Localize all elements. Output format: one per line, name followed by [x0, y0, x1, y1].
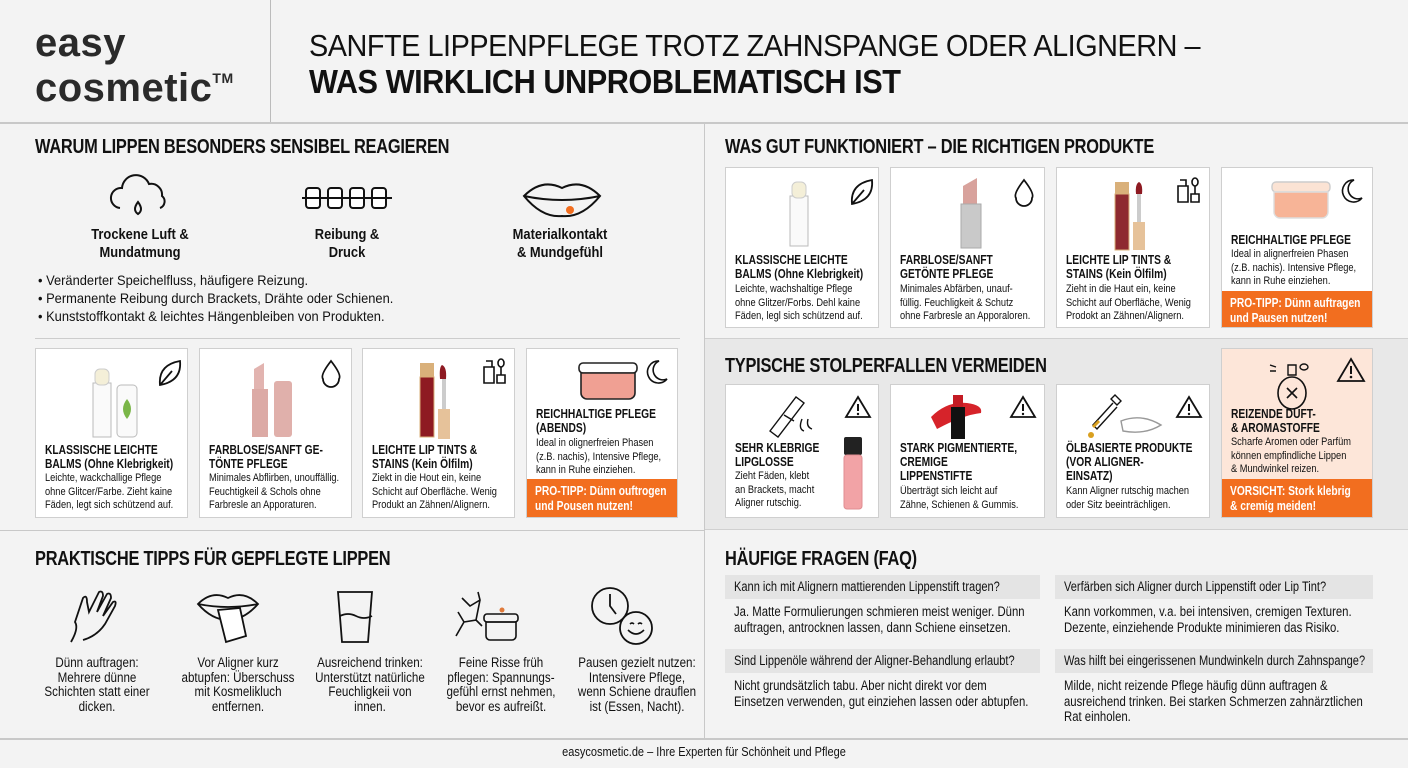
faq 1: Kann ich mit Alignern mattierenden Lippenstift tragen?	[734, 579, 1000, 594]
section: praktische tipps: Vor Aligner kurz	[197, 655, 279, 670]
card: lipgloss: Zieht Fäden, klebt	[735, 470, 809, 482]
bullets: • Kunststoffkontakt & leichtes Hängenbleiben von Produkten.	[38, 308, 385, 324]
section: praktische tipps	[0, 530, 704, 714]
card: farblose right: FARBLOSE/SANFT	[900, 253, 993, 267]
card: balms right: Leichte, wachshaltige Pflege	[735, 283, 852, 295]
section heading: was gut funktioniert: WAS GUT FUNKTIONIERT – DIE RICHTIGEN PRODUKTE	[725, 136, 1154, 158]
card: lip tints right: STAINS (Kein Ölfilm)	[1066, 267, 1167, 281]
card: ölbasiert: (VOR ALIGNER-	[1066, 455, 1144, 469]
title	[309, 28, 1201, 100]
label	[315, 226, 379, 261]
heading: PRAKTISCHE TIPPS FÜR GEPFLEGTE LIPPEN	[35, 548, 390, 570]
section: praktische tipps: Ausreichend trinken:	[317, 655, 423, 670]
card: lipgloss: LIPGLOSSE	[735, 455, 794, 469]
section: praktische tipps: Feuchligkeii von	[328, 684, 412, 699]
section: faq: auftragen, antrocknen lassen, dann Schiene einsetzen.	[734, 620, 1011, 634]
faq 4	[1055, 649, 1373, 673]
text: dicken.	[79, 698, 115, 714]
card: duftstoffe: REIZENDE DUFT-	[1231, 407, 1316, 421]
heading: HÄUFIGE FRAGEN (FAQ)	[725, 548, 917, 570]
card: lip tints right: Schicht auf Oberfläche, Wenig	[1066, 296, 1191, 308]
title: SANFTE LIPPENPFLEGE TROTZ ZAHNSPANGE ODER ALIGNERN –	[309, 28, 1200, 63]
card: farblose: FARBLOSE/SANFT GE-	[209, 443, 323, 457]
card: reichhaltig right: kann in Ruhe einziehen.	[1231, 275, 1330, 287]
card: lipgloss: SEHR KLEBRIGE	[735, 441, 819, 455]
card: lip tints: LEICHTE LIP TINTS &	[372, 443, 477, 457]
section: faq: Ja. Matte Formulierungen schmieren meist weniger. Dünn	[734, 604, 1025, 619]
card: reichhaltig: PRO-TIPP: Dünn ouftrogen	[535, 484, 667, 498]
card: duftstoffe: & Mundwinkel reizen.	[1231, 463, 1319, 475]
icon: braces	[302, 187, 392, 209]
card: reichhaltig right: (z.B. nachis). Intensive Pflege,	[1231, 262, 1356, 274]
card: pigmentierte: LIPPENSTIFTE	[900, 469, 972, 483]
card: farblose right: Minimales Abfärben, unauf-	[900, 283, 1013, 295]
text	[44, 655, 150, 714]
icon: cloud	[110, 174, 166, 216]
section: praktische tipps: entfernen.	[212, 698, 264, 714]
icon: hand	[70, 590, 117, 642]
card: ölbasiert: ÖLBASIERTE PRODUKTE	[1066, 441, 1192, 455]
section: faq: Kann vorkommen, v.a. bei intensiven, cremigen Texturen.	[1064, 604, 1352, 619]
card: lip tints right: Zieht in die Haut ein, keine	[1066, 283, 1176, 295]
card: reichhaltig: (z.B. nachis), Intensive Pflege,	[536, 450, 661, 462]
icon: clock smiley	[591, 587, 653, 645]
card: reichhaltig: kann in Ruhe einziehen.	[536, 464, 635, 476]
card: balms right: BALMS (Ohne Klebrigkeit)	[735, 267, 863, 281]
label: Druck	[329, 244, 365, 261]
icon: lips tissue	[196, 594, 260, 644]
card: balms: Leichte, wackchallige Pflege	[45, 472, 161, 484]
faq 2: Verfärben sich Aligner durch Lippenstift oder Lip Tint?	[1064, 579, 1326, 594]
card: balms: Fäden, legt sich schützend auf.	[45, 499, 173, 511]
card: pigmentierte: STARK PIGMENTIERTE,	[900, 441, 1017, 455]
section: faq: Dezente, einziehende Produkte minimieren das Risiko.	[1064, 620, 1339, 634]
card: farblose right: ohne Farbresle an Apporaloren.	[900, 310, 1030, 322]
section: warum lippen	[35, 136, 680, 339]
section: faq: Rat einholen.	[1064, 709, 1131, 724]
card: reichhaltig: Ideal in olignerfreien Phasen	[536, 437, 653, 449]
faq 3	[725, 649, 1040, 673]
footer: easycosmetic.de – Ihre Experten für Schönheit und Pflege	[562, 745, 846, 759]
card: lip tints right: LEICHTE LIP TINTS &	[1066, 253, 1171, 267]
section: stolperfallen background	[705, 338, 1408, 530]
faq 4: Was hilft bei eingerissenen Mundwinkeln durch Zahnspange?	[1064, 653, 1365, 668]
card: lipgloss: an Brackets, macht	[735, 484, 814, 496]
section: praktische tipps: innen.	[354, 698, 386, 714]
card: farblose right: füllig. Feuchligkeit & Schutz	[900, 296, 1013, 308]
section: faq: Einsetzen verwenden, gut einziehen lassen oder abtupfen.	[734, 694, 1028, 708]
label	[513, 226, 608, 261]
section: praktische tipps: wenn Schiene drauflen	[578, 684, 696, 699]
card: lip tints: Ziekt in die Hout ein, keine	[372, 472, 481, 484]
icon: cracks jar	[455, 592, 519, 641]
card: balms: BALMS (Ohne Klebrigkeit)	[45, 457, 173, 471]
bullets: • Permanente Reibung durch Brackets, Drähte oder Schienen.	[38, 290, 393, 306]
card: lip tints	[362, 348, 515, 518]
card: reichhaltig right	[1221, 167, 1373, 328]
heading: TYPISCHE STOLPERFALLEN VERMEIDEN	[725, 355, 1047, 377]
card: reichhaltig: (ABENDS)	[536, 421, 586, 435]
card: balms right	[725, 167, 879, 328]
faq 2	[1055, 575, 1373, 599]
section: praktische tipps: Feine Risse früh	[459, 655, 543, 670]
section: praktische tipps: gefühl ernst nehmen,	[446, 684, 556, 699]
text: Mehrere dünne	[58, 670, 136, 684]
card: reichhaltig right: Ideal in alignerfreien Phasen	[1231, 248, 1348, 260]
section: faq: Milde, nicht reizende Pflege häufig dünn auftragen &	[1064, 678, 1328, 693]
header logo: cosmeticTM	[35, 66, 234, 110]
card: duftstoffe	[1221, 348, 1373, 518]
card: farblose: Farbresle an Apporaturen.	[209, 499, 317, 511]
card: balms right: KLASSISCHE LEICHTE	[735, 253, 848, 267]
card: duftstoffe: & cremig meiden!	[1230, 499, 1316, 513]
label: Reibung &	[315, 226, 379, 243]
header logo	[35, 21, 234, 110]
card: pigmentierte	[890, 384, 1045, 518]
card: balms right: Fäden, legl sich schützend auf.	[735, 310, 863, 322]
card: farblose: Minimales Abflirben, unouffällig.	[209, 472, 339, 484]
card: farblose right: GETÖNTE PFLEGE	[900, 267, 993, 281]
faq 1	[725, 575, 1040, 599]
card: balms: KLASSISCHE LEICHTE	[45, 443, 158, 457]
header logo: easy	[35, 21, 126, 65]
card: reichhaltig right: REICHHALTIGE PFLEGE	[1231, 233, 1351, 247]
card: farblose right	[890, 167, 1045, 328]
section: praktische tipps: abtupfen: Überschuss	[182, 670, 294, 684]
card: lipgloss: Aligner rutschig.	[735, 497, 801, 509]
label: Trockene Luft &	[91, 226, 189, 243]
label	[91, 226, 189, 261]
card: balms right: ohne Glitzer/Forbs. Dehl kaine	[735, 296, 860, 308]
card: reichhaltig: und Pousen nutzen!	[535, 499, 633, 513]
card: balms	[35, 348, 188, 518]
section: praktische tipps: mit Kosmelikluch	[194, 684, 282, 699]
icon: lips	[522, 183, 602, 218]
heading: WARUM LIPPEN BESONDERS SENSIBEL REAGIEREN	[35, 136, 449, 158]
card: farblose: Feuchtigkeil & Schols ohne	[209, 486, 321, 498]
card: farblose	[199, 348, 352, 518]
label: & Mundgefühl	[517, 244, 603, 261]
label: Mundatmung	[100, 244, 180, 261]
card: duftstoffe: können empfindliche Lippen	[1231, 450, 1346, 462]
card: balms: ohne Glitcer/Farbe. Zieht kaine	[45, 486, 172, 498]
text: Schichten statt einer	[44, 684, 150, 699]
card: pigmentierte: Zähne, Schienen & Gummis.	[900, 498, 1018, 510]
card: duftstoffe: & AROMASTOFFE	[1231, 421, 1320, 435]
card: duftstoffe: Scharfe Aromen oder Parfüm	[1231, 436, 1351, 448]
card: reichhaltig: REICHHALTIGE PFLEGE	[536, 407, 656, 421]
card: ölbasiert: oder Sitz beeinträchligen.	[1066, 498, 1171, 510]
card: lip tints: Schicht auf Oberfläche. Wenig	[372, 486, 497, 498]
section: faq: ausreichend trinken. Bei starken Schmerzen zahnärztlichen	[1064, 694, 1363, 708]
section: praktische tipps: bevor es aufreißt.	[456, 698, 546, 714]
card: pigmentierte: Überträgt sich leicht auf	[900, 485, 997, 497]
card: lip tints right: Prodokt an Zähnen/Alignern.	[1066, 310, 1184, 322]
section: praktische tipps: Unterstützt natürliche	[315, 670, 425, 684]
card: reichhaltig	[526, 348, 678, 518]
section: praktische tipps: ist (Essen, Nacht).	[590, 698, 684, 714]
card: farblose: TÖNTE PFLEGE	[209, 457, 288, 471]
icon: glass	[337, 591, 373, 643]
text: Dünn auftragen:	[55, 655, 139, 670]
section: praktische tipps: Intensivere Pflege,	[589, 670, 685, 684]
card: lip tints: STAINS (Kein Ölfilm)	[372, 457, 473, 471]
section: faq: Nicht grundsätzlich tabu. Aber nicht direkt vor dem	[734, 678, 987, 693]
section: praktische tipps: pflegen: Spannungs-	[447, 670, 555, 684]
card: reichhaltig right: PRO-TIPP: Dünn auftragen	[1230, 296, 1360, 310]
faq 3: Sind Lippenöle während der Aligner-Behandlung erlaubt?	[734, 653, 1015, 668]
card: ölbasiert: Kann Aligner rutschig machen	[1066, 485, 1189, 497]
card: lip tints right	[1056, 167, 1210, 328]
bullets: • Veränderter Speichelfluss, häufigere Reizung.	[38, 272, 308, 288]
card: ölbasiert: EINSATZ)	[1066, 469, 1113, 483]
card: reichhaltig right: und Pausen nutzen!	[1230, 311, 1327, 325]
section: praktische tipps: Pausen gezielt nutzen:	[578, 655, 696, 670]
card: lipgloss	[725, 384, 879, 518]
card: pigmentierte: CREMIGE	[900, 455, 948, 469]
card: duftstoffe: VORSICHT: Stork klebrig	[1230, 484, 1351, 498]
bullets	[38, 272, 393, 324]
title: WAS WIRKLICH UNPROBLEMATISCH IST	[309, 63, 901, 100]
card: ölbasiert	[1056, 384, 1210, 518]
section: faq	[725, 548, 1373, 724]
label: Materialkontakt	[513, 226, 607, 243]
card: lip tints: Produkt an Zähnen/Alignern.	[372, 499, 490, 511]
